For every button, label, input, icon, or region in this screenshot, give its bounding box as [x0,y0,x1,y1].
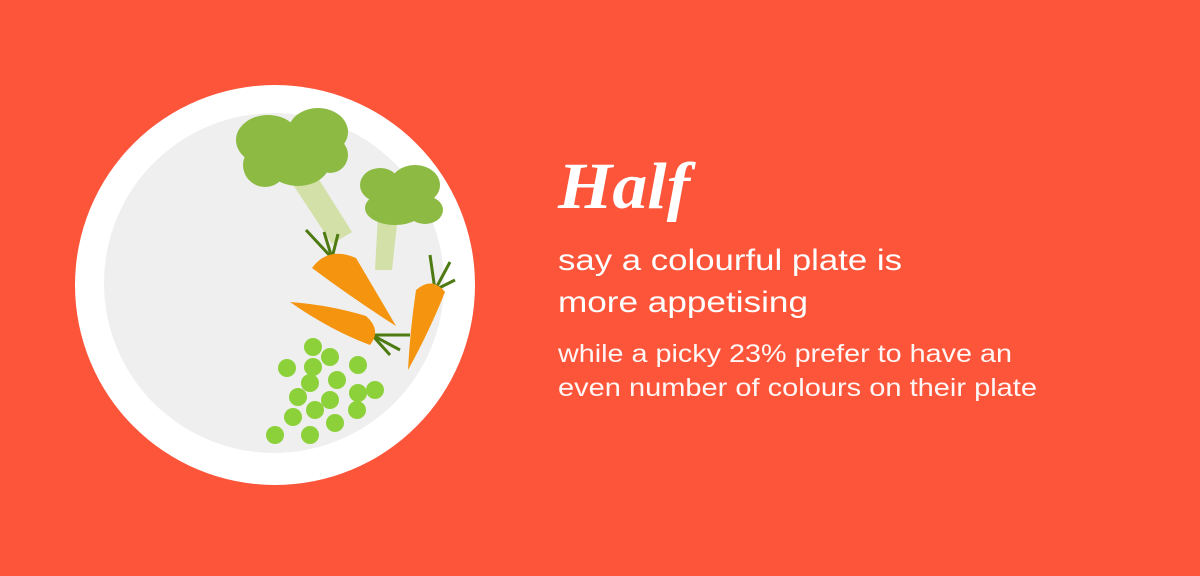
icon: peas [266,338,384,444]
icon: broccoli large [236,108,352,244]
body text [557,340,1037,402]
icon: broccoli small [360,165,443,270]
heading: Half: Half [557,150,696,223]
subheading: say a colourful plate is [558,244,902,277]
icon: carrot 3 [290,302,410,355]
icon: carrot 2 [408,255,455,370]
body text: even number of colours on their plate [558,374,1037,402]
plate [75,85,475,485]
subheading [558,244,902,319]
subheading: more appetising [558,286,808,319]
body text: while a picky 23% prefer to have an [557,340,1012,368]
icon: carrot 1 [306,230,396,326]
